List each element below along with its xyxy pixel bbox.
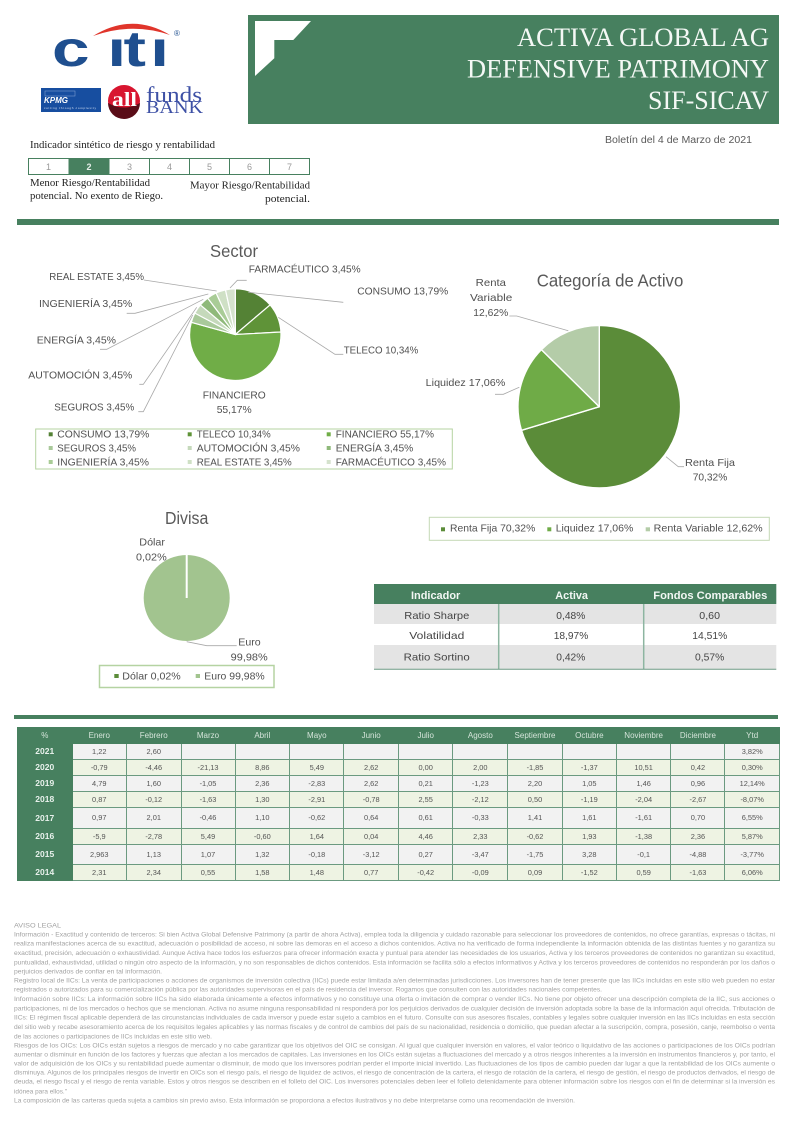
monthly performance table: 2,62	[364, 763, 378, 772]
legend: sector: INGENIERÍA 3,45%	[57, 455, 149, 468]
legend: sector: FINANCIERO 55,17%	[336, 429, 434, 441]
monthly performance table: 0,59	[636, 868, 651, 877]
monthly performance table: Noviembre	[624, 730, 663, 740]
monthly performance table: 0,30%	[742, 763, 763, 772]
legend: asset category: Renta Variable 12,62%	[654, 523, 763, 535]
monthly performance table: -8,07%	[740, 795, 764, 804]
monthly performance table: -0,78	[363, 795, 380, 804]
table rows: Ratio Sortino	[404, 652, 470, 664]
risk scale: 3	[127, 162, 132, 172]
data labels: TELECO 10,34%	[344, 345, 418, 357]
bulletin date: Boletín del 4 de Marzo de 2021	[605, 135, 752, 146]
monthly performance table: 1,10	[255, 813, 270, 822]
monthly performance table: -0,18	[308, 850, 325, 859]
legend: currency	[100, 666, 274, 688]
monthly performance table: 2,55	[418, 795, 433, 804]
legal notice: puntualidad, exhaustividad, utilidad o ningún otro aspecto de la información, y no son responsables de dichos contenidos. Esta información se facilita sólo a efectos informativos y Activa y los terceros proveedores de contenidos no responderán por los daños o	[14, 960, 776, 967]
panel: indicators table	[374, 584, 776, 669]
monthly performance table: 2,60	[147, 747, 161, 756]
monthly performance table: -0,42	[417, 868, 434, 877]
monthly performance table: -5,9	[93, 832, 106, 841]
logo: citi: i	[150, 21, 169, 77]
risk scale	[28, 158, 310, 174]
risk scale: 6	[247, 162, 252, 172]
table header: Indicador	[411, 590, 461, 602]
data labels: Euro	[238, 637, 261, 649]
monthly performance table: -0,62	[527, 832, 543, 841]
monthly performance table: Septiembre	[515, 730, 555, 740]
title: SIF-SICAV	[648, 85, 769, 115]
monthly performance table: Marzo	[197, 730, 219, 740]
risk high caption	[190, 181, 311, 205]
monthly performance table: Mayo	[307, 730, 327, 740]
monthly performance table: 1,58	[255, 868, 270, 877]
monthly performance table: 0,70	[691, 813, 705, 822]
legal notice: Información - Exactitud y contenido de terceros: Si bien Activa Global Defensive Patrimony (a partir de ahora Activa), emplea toda la diligencia y cuidado razonable para seleccionar los proveedores de contenidos, no ofrece garantías, expresas o tácitas, ni	[14, 931, 775, 938]
icon: white corner logo	[255, 21, 311, 76]
legal notice: La composición de las carteras queda sujeta a cambios sin previo aviso. Esta información se proporciona a efectos ilustrativos y no debe interpretarse como una recomendación de inversión.	[14, 1098, 575, 1105]
monthly performance table: 0,77	[364, 868, 378, 877]
monthly performance table: -3,12	[363, 850, 380, 859]
monthly performance table: -1,19	[581, 795, 598, 804]
monthly performance table: -1,75	[527, 850, 543, 859]
monthly performance table: 0,87	[92, 795, 106, 804]
table rows: 0,60	[699, 610, 720, 622]
panel: asset category chart	[426, 271, 769, 540]
monthly performance table	[17, 727, 780, 881]
heading: Sector: Sector	[210, 241, 258, 261]
table header: Fondos Comparables	[653, 590, 767, 602]
legal notice: idónea para ellos."	[14, 1088, 67, 1095]
risk low caption: Menor Riesgo/Rentabilidad	[30, 178, 151, 189]
risk high caption: Mayor Riesgo/Rentabilidad	[190, 181, 311, 192]
monthly performance table: 5,49	[310, 763, 324, 772]
monthly performance table: 2,963	[90, 850, 108, 859]
risk high caption: potencial.	[265, 194, 310, 205]
monthly performance table: 2,20	[528, 779, 542, 788]
monthly performance table: Abril	[254, 730, 270, 740]
monthly performance table: -2,91	[308, 795, 325, 804]
monthly performance table: 1,32	[255, 850, 270, 859]
monthly performance table: 2015	[35, 849, 54, 859]
leader lines	[100, 280, 343, 412]
monthly performance table: -2,67	[690, 795, 706, 804]
legend: currency: Dólar 0,02%	[122, 670, 181, 682]
monthly performance table: -4,46	[145, 763, 162, 772]
monthly performance table: 0,64	[364, 813, 378, 822]
monthly performance table: 4,46	[418, 832, 433, 841]
monthly performance table: 1,22	[92, 747, 106, 756]
monthly performance table: -3,47	[472, 850, 489, 859]
data labels: 12,62%	[473, 307, 508, 319]
risk scale: 4	[167, 162, 172, 172]
data labels: AUTOMOCIÓN 3,45%	[28, 369, 132, 382]
monthly performance table: 8,86	[255, 763, 270, 772]
monthly performance table: 12,14%	[740, 779, 765, 788]
monthly performance table: Ytd	[746, 730, 758, 740]
legend: sector: TELECO 10,34%	[197, 429, 271, 441]
data labels: FARMACÉUTICO 3,45%	[249, 263, 361, 276]
legal notice: Registro local de IICs: La venta de participaciones o acciones de organismos de inversión colectiva (IICs) puede estar limitada a/en determinadas jurisdicciones. Los inversores han de tener presente que las IICs incluidas en este sitio web pueden no estar	[14, 978, 775, 985]
data labels	[136, 537, 268, 664]
legend: currency: Euro 99,98%	[204, 670, 265, 682]
legal notice: exactitud, precisión, adecuación o exhaustividad. Aunque Activa hace todos los esfuerzos para ofrecer información exacta y puntual para atender las necesidades de los usuarios, Activa y los terceros proveedores de contenidos no garantizan su exactitud,	[14, 950, 775, 957]
legend: sector: CONSUMO 13,79%	[57, 429, 149, 441]
header banner	[248, 15, 779, 124]
legend: sector: REAL ESTATE 3,45%	[197, 456, 292, 468]
legal notice: aumentar o disminuir en función de los factores y fuerzas que afectan a los mercados de capitales. Las inversiones en los OICs están sujetas a fluctuaciones del mercado y a otros riesgos inherentes a la inversión en instrumentos financieros y, por tanto, el	[14, 1052, 775, 1059]
logo: allfunds bank	[108, 82, 203, 119]
monthly performance table: 0,96	[691, 779, 705, 788]
monthly performance table: 10,51	[634, 763, 653, 772]
monthly performance table: 1,46	[636, 779, 651, 788]
monthly performance table: 0,61	[418, 813, 433, 822]
risk scale: 1	[46, 162, 51, 172]
monthly performance table: 3,82%	[742, 747, 763, 756]
monthly performance table: 2,31	[92, 868, 106, 877]
data labels	[28, 263, 448, 416]
risk low caption: potencial. No exento de Riego.	[30, 191, 163, 202]
monthly performance table: 2,34	[147, 868, 161, 877]
pie: currency	[144, 555, 230, 641]
monthly performance table: 1,05	[582, 779, 597, 788]
risk low caption	[30, 178, 163, 202]
legend: sector: SEGUROS 3,45%	[57, 443, 136, 455]
leader lines	[495, 316, 684, 467]
legal notice: Riesgos de los OICs: Los OICs están sujetos a riesgos de mercado y no cabe garantizar que los objetivos del OIC se consigan. Al igual que cualquier inversión en valores, el valor teórico o liquidativo de las acciones o participaciones de los OICs podrían	[14, 1042, 776, 1049]
legal notice: Información sobre IICs: La información sobre IICs ha sido elaborada únicamente a efectos informativos y no constituye una oferta o invitación de comprar o vender IICs. No tiene por objeto ofrecer una descripción completa de la IIC, sus acciones o	[14, 996, 776, 1003]
monthly performance table: Octubre	[575, 730, 604, 740]
monthly performance table: -1,37	[581, 763, 598, 772]
legal notice: registrados o autorizados para su comercialización pública por las autoridades supervisoras en el país de residencia del inversor. Rogamos que consulten con las autoridades nacionales competentes.	[14, 987, 602, 994]
data labels: Renta	[476, 277, 506, 289]
monthly performance table: %	[41, 730, 48, 740]
monthly performance table: 0,42	[691, 763, 705, 772]
legend: sector: AUTOMOCIÓN 3,45%	[197, 442, 300, 455]
monthly performance table: 1,48	[310, 868, 324, 877]
data labels: CONSUMO 13,79%	[357, 286, 448, 298]
monthly performance table: 2017	[35, 813, 54, 823]
monthly performance table: -1,85	[527, 763, 543, 772]
monthly performance table: -2,04	[635, 795, 652, 804]
logo: allfunds bank: BANK	[146, 97, 203, 117]
monthly performance table: 2018	[35, 794, 54, 804]
monthly performance table: 2,36	[691, 832, 705, 841]
monthly performance table: -0,79	[91, 763, 108, 772]
pie: sector	[190, 289, 281, 380]
logo: citi: t	[124, 21, 146, 77]
monthly performance table: Febrero	[140, 730, 168, 740]
monthly performance table: 2,33	[473, 832, 488, 841]
logo: citi	[52, 21, 180, 77]
heading: Categoría de Activo: Categoría de Activo	[537, 271, 683, 291]
logo: citi: i	[107, 21, 126, 77]
legend: sector: FARMACÉUTICO 3,45%	[336, 455, 446, 468]
monthly performance table: 0,00	[418, 763, 433, 772]
monthly performance table: 6,55%	[742, 813, 763, 822]
legal notice: de las acciones o participaciones de IICs incluidas en este sitio web.	[14, 1033, 212, 1040]
monthly performance table: 2021	[35, 746, 54, 756]
title: DEFENSIVE PATRIMONY	[467, 53, 769, 83]
monthly performance table: 5,87%	[742, 832, 763, 841]
legal notice: IICs: El régimen fiscal aplicable dependerá de las circunstancias individuales de cada inversor y puede estar sujeto a cambios en el futuro. Consulte con sus asesores fiscales, contables y legales sobre cualquier inversión en las IICs incluidas en esta sección	[14, 1015, 776, 1022]
legal notice: valor de adquisición de los OICs y su rentabilidad puede aumentar o disminuir, de modo que los inversores podrían perder el importe inicial invertido. Las fluctuaciones de los tipos de cambio pueden dar lugar a que la rentabilidad de los OICs aumente o	[14, 1061, 776, 1068]
monthly performance table: -3,77%	[740, 850, 764, 859]
monthly performance table: -0,33	[472, 813, 489, 822]
monthly performance table: -4,88	[690, 850, 706, 859]
monthly performance table: 2,01	[147, 813, 161, 822]
data labels: REAL ESTATE 3,45%	[49, 271, 144, 283]
data labels: 0,02%	[136, 551, 167, 563]
heading: Divisa: Divisa	[165, 508, 209, 528]
legal notice: del sitio web y recabe asesoramiento acerca de los requisitos legales aplicables y las normas fiscales y de control de cambios del país de su nacionalidad, residencia o domicilio, que puedan afectar a la suscripción, compra, posesión, canje, reembolso o venta	[14, 1024, 776, 1031]
table rows: 18,97%	[554, 630, 588, 642]
monthly performance table: 1,61	[582, 813, 597, 822]
data labels: Renta Fija	[685, 457, 735, 469]
table rows: Ratio Sharpe	[404, 610, 469, 622]
monthly performance table: -0,12	[145, 795, 162, 804]
monthly performance table: 0,97	[92, 813, 106, 822]
monthly performance table: -2,83	[308, 779, 325, 788]
legal notice: AVISO LEGAL	[14, 922, 62, 929]
legal notice: disminuya. Algunos de los principales riesgos de invertir en OICs son el riesgo país, el riesgo de liquidez de activos, el riesgo de concentración de la cartera, el riesgo de rotación de la cartera, el riesgo de gestión, el riesgo de productos derivados, el riesgo de	[14, 1070, 776, 1077]
monthly performance table: 1,64	[310, 832, 324, 841]
data labels	[426, 277, 735, 484]
table rows	[404, 610, 727, 664]
monthly performance table: Junio	[362, 730, 381, 740]
risk scale: 5	[207, 162, 212, 172]
monthly performance table: -1,63	[200, 795, 216, 804]
data labels: ENERGÍA 3,45%	[37, 334, 116, 347]
data labels: SEGUROS 3,45%	[54, 402, 134, 414]
monthly performance table: 0,50	[528, 795, 542, 804]
monthly performance table: -0,62	[308, 813, 325, 822]
monthly performance table: -1,61	[635, 813, 652, 822]
monthly performance table: -2,78	[145, 832, 162, 841]
monthly performance table: Enero	[89, 730, 110, 740]
legal notice: deuda, el riesgo fiscal y el riesgo de renta variable. Estos y otros riesgos se describen en el folleto del OIC. Los inversores potenciales deben leer el folleto detenidamente para obtener información sobre los riesgos con el fin de determinar si la inversión es	[14, 1079, 775, 1086]
data labels: Variable	[470, 292, 512, 304]
monthly performance table: 2,00	[473, 763, 488, 772]
monthly performance table: 1,30	[255, 795, 270, 804]
monthly performance table: 1,07	[201, 850, 215, 859]
monthly performance table: 1,93	[582, 832, 597, 841]
logo: allfunds bank: funds	[146, 82, 202, 107]
logo: citi: c	[52, 21, 90, 77]
risk scale: 7	[287, 162, 292, 172]
monthly performance table: 0,55	[201, 868, 215, 877]
monthly performance table: 4,79	[92, 779, 106, 788]
monthly performance table: -1,38	[635, 832, 652, 841]
legal notice: realiza manifestaciones acerca de su exactitud, adecuación o posibilidad de acceso, ni sobre las demoras en el acceso a dichos contenidos. Activa no ha verificado de forma independiente la información obtenida de las distintas fuentes y no garantiza su	[14, 940, 776, 947]
legend: asset category	[429, 517, 769, 540]
data labels: 55,17%	[217, 404, 252, 416]
monthly performance table: 1,13	[147, 850, 161, 859]
logo: citi: ®	[174, 29, 180, 38]
leader line	[187, 642, 237, 646]
monthly performance table: 0,04	[364, 832, 378, 841]
table rows: Volatilidad	[409, 630, 464, 642]
panel: currency chart	[100, 508, 274, 688]
data labels: Liquidez 17,06%	[426, 377, 505, 389]
monthly performance table: -21,13	[198, 763, 218, 772]
data labels: FINANCIERO	[203, 389, 266, 401]
risk scale: 2	[86, 162, 92, 172]
monthly performance table: 3,28	[582, 850, 597, 859]
legend: sector: ENERGÍA 3,45%	[336, 442, 413, 455]
monthly performance table: 2,36	[255, 779, 270, 788]
legal notice	[14, 922, 776, 1105]
legal notice: participaciones, ni de los mercados o hechos que se mencionan. Activa no asume ninguna responsabilidad ni responderá por los perjuicios derivados de cualquier decisión de inversión adoptada sobre la base de la información aquí ofrecida. Tributación de	[14, 1005, 776, 1012]
monthly performance table: -1,52	[581, 868, 598, 877]
monthly performance table: 0,21	[418, 779, 433, 788]
table rows: 0,48%	[556, 610, 585, 622]
logo: KPMG: cutting through complexity	[44, 106, 96, 110]
monthly performance table: -1,63	[690, 868, 706, 877]
legend: asset category: Liquidez 17,06%	[556, 523, 633, 535]
monthly performance table: -0,1	[637, 850, 650, 859]
risk indicator heading: Indicador sintético de riesgo y rentabilidad	[30, 140, 216, 151]
monthly performance table: -0,46	[200, 813, 216, 822]
monthly performance table: Agosto	[468, 730, 493, 740]
monthly performance table: 1,60	[147, 779, 161, 788]
monthly performance table: 2020	[35, 762, 54, 772]
monthly performance table: Julio	[417, 730, 434, 740]
monthly performance table: 0,27	[418, 850, 433, 859]
logo: allfunds bank: all	[112, 89, 138, 111]
panel: sector chart	[28, 241, 452, 469]
title	[467, 22, 769, 115]
legend: sector	[36, 429, 452, 469]
pie: asset category	[518, 325, 681, 488]
monthly performance table: -0,60	[254, 832, 271, 841]
monthly performance table: 5,49	[201, 832, 215, 841]
table header: Activa	[555, 590, 589, 602]
logo: KPMG	[41, 88, 101, 112]
title: ACTIVA GLOBAL AG	[517, 22, 769, 52]
data labels: 70,32%	[693, 472, 727, 484]
logo: KPMG: KPMG	[44, 96, 68, 105]
monthly performance table: 2014	[35, 867, 54, 877]
data labels: Dólar	[139, 537, 166, 549]
monthly performance table: 6,06%	[742, 868, 763, 877]
table header	[411, 590, 767, 602]
monthly performance table: 0,09	[528, 868, 542, 877]
monthly performance table: 1,41	[528, 813, 542, 822]
data labels: 99,98%	[231, 652, 268, 664]
monthly performance table: 2019	[35, 778, 54, 788]
legend: asset category: Renta Fija 70,32%	[450, 523, 535, 535]
table rows: 0,57%	[695, 652, 724, 664]
legal notice: perjuicios derivados de confiar en tal información.	[14, 969, 162, 976]
monthly performance table: 2016	[35, 831, 54, 841]
monthly performance table: -2,12	[472, 795, 489, 804]
monthly performance table: -0,09	[472, 868, 489, 877]
monthly performance table: Diciembre	[680, 730, 716, 740]
table rows: 14,51%	[692, 630, 727, 642]
monthly performance table: -1,05	[200, 779, 216, 788]
table rows: 0,42%	[556, 652, 585, 664]
monthly performance table: 2,62	[364, 779, 378, 788]
data labels: INGENIERÍA 3,45%	[39, 297, 132, 310]
monthly performance table: -1,23	[472, 779, 489, 788]
